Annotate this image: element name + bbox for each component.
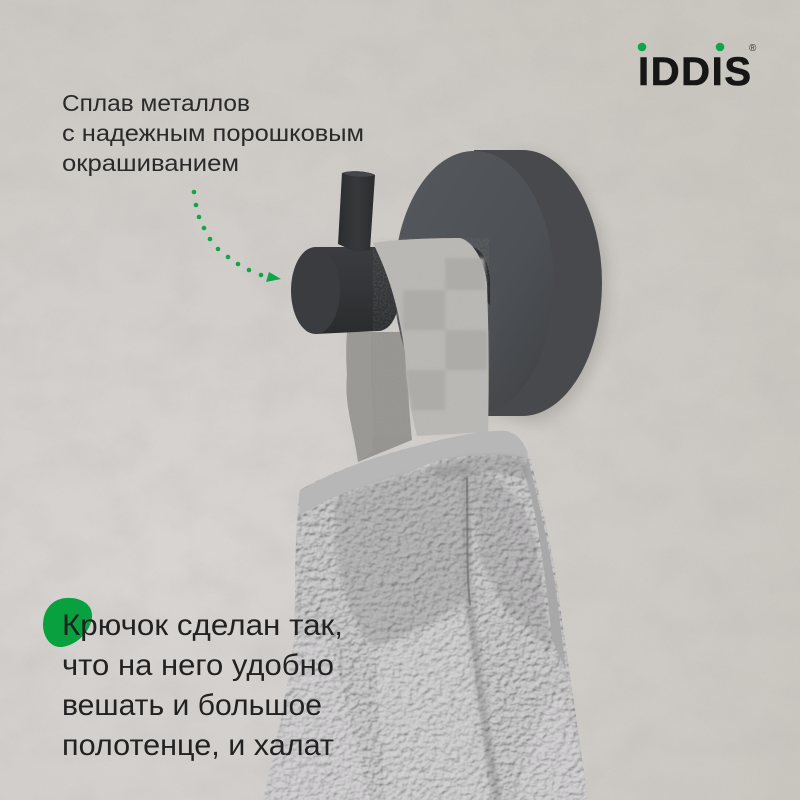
front strap of towel loop xyxy=(373,238,489,436)
central fold shadow xyxy=(466,470,498,800)
towel xyxy=(250,420,600,800)
annotation: top text xyxy=(62,90,364,176)
logo: IDDIS: ® xyxy=(749,43,757,54)
caption: bottom text: Крючок сделан так, xyxy=(62,609,343,642)
back strap of towel loop xyxy=(346,332,412,462)
vertical peg xyxy=(338,171,375,252)
annotation: top text: Сплав металлов xyxy=(62,90,250,116)
horizontal cylinder xyxy=(291,247,400,334)
icon: green blob behind caption xyxy=(43,598,92,647)
annotation: top text: окрашиванием xyxy=(62,150,239,176)
shaded folded panel xyxy=(335,466,465,647)
towel woven border xyxy=(298,431,528,515)
caption: bottom text xyxy=(62,609,343,762)
dark terry under the band xyxy=(432,455,528,480)
icon: dotted green arrow xyxy=(192,190,281,282)
annotation: top text: с надежным порошковым xyxy=(62,120,364,146)
wall plate xyxy=(394,150,602,416)
light lower panels xyxy=(263,640,370,800)
wall hook xyxy=(291,150,602,416)
caption: bottom text: что на него удобно xyxy=(62,649,334,682)
logo: IDDIS: IDDIS xyxy=(638,50,751,94)
caption: bottom text: полотенце, и халат xyxy=(62,729,334,762)
hook shadow on wall xyxy=(448,154,608,422)
caption: bottom text: вешать и большое xyxy=(62,689,322,722)
